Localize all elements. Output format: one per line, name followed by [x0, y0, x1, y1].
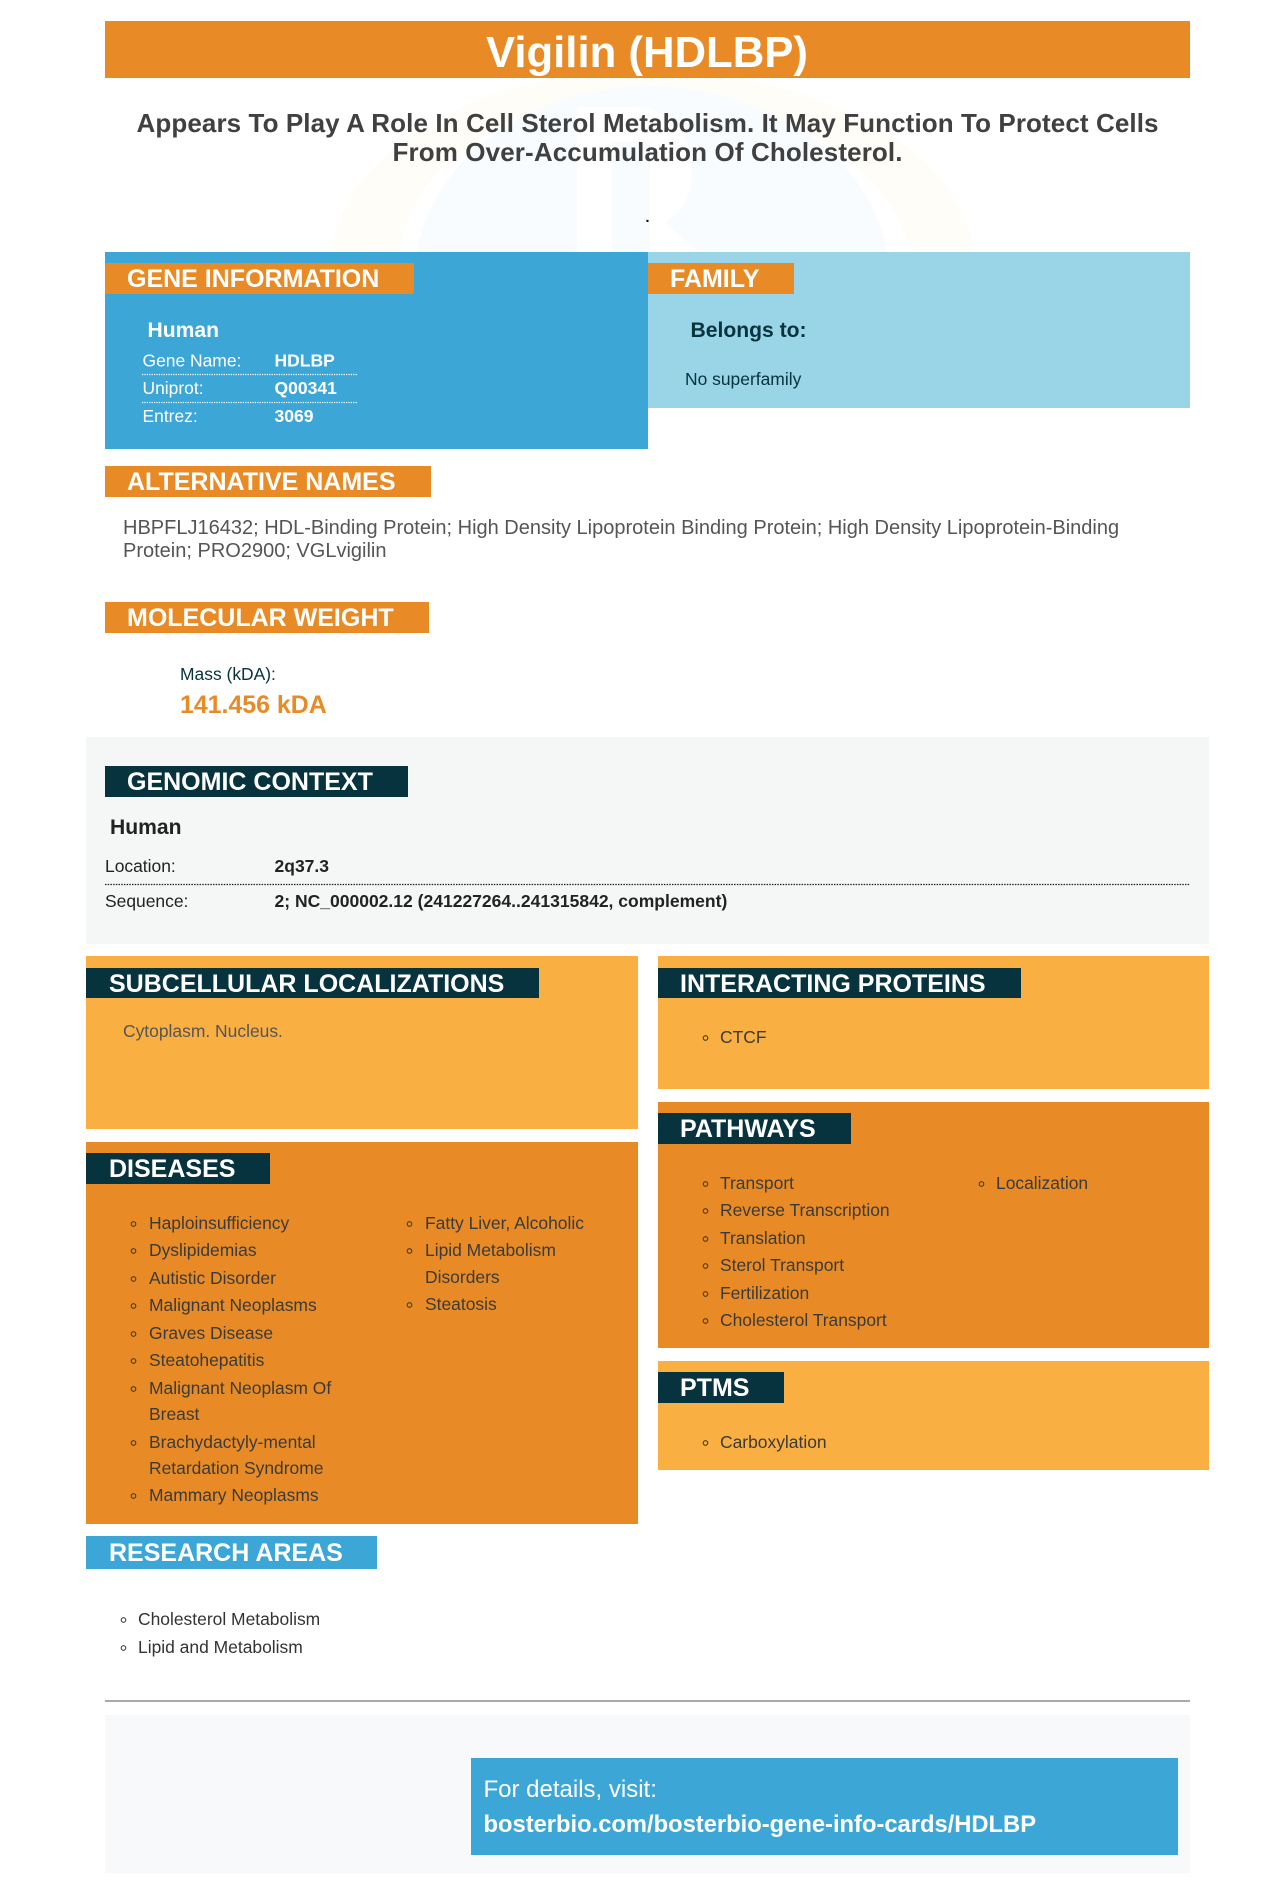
- heading: molecular weight: MOLECULAR WEIGHT: [127, 604, 394, 632]
- disease list column 1: Autistic Disorder: [149, 1268, 276, 1288]
- panel: ptms: [658, 1361, 1209, 1470]
- disease list column 1: Malignant Neoplasms: [149, 1295, 317, 1315]
- panel: interacting proteins: [658, 956, 1209, 1089]
- heading: gene information: GENE INFORMATION: [127, 265, 379, 293]
- heading: ptms: PTMS: [680, 1374, 749, 1402]
- disease list column 1: Haploinsufficiency: [149, 1213, 290, 1233]
- ptm list: Carboxylation: [720, 1432, 827, 1452]
- disease list column 2: Fatty Liver, Alcoholic: [425, 1213, 584, 1233]
- location row: 2q37.3: [274, 856, 329, 876]
- research list: Cholesterol Metabolism: [138, 1609, 320, 1629]
- uniprot row: [142, 378, 337, 398]
- heading: research areas: [86, 1536, 377, 1569]
- disease list column 1: Dyslipidemias: [149, 1240, 257, 1260]
- panel: gene information: [105, 252, 648, 449]
- heading: interacting proteins: INTERACTING PROTEINS: [680, 970, 986, 998]
- heading: alternative names: ALTERNATIVE NAMES: [127, 468, 396, 496]
- pathway list column 1: Fertilization: [720, 1283, 809, 1303]
- disease list column 1: Mammary Neoplasms: [149, 1485, 319, 1505]
- panel: family: [648, 252, 1190, 408]
- callout: details link: For details, visit:: [484, 1776, 657, 1803]
- disease list column 1: [131, 1213, 331, 1505]
- title banner: [105, 21, 1190, 78]
- title banner: Vigilin (HDLBP): [486, 28, 808, 77]
- research list: Lipid and Metabolism: [138, 1637, 303, 1657]
- heading: subcellular localizations: SUBCELLULAR LOCALIZATIONS: [109, 970, 504, 998]
- protein list: CTCF: [720, 1027, 766, 1047]
- disease list column 1: Steatohepatitis: [149, 1350, 265, 1370]
- uniprot row: Uniprot:: [142, 378, 204, 398]
- gene name row: HDLBP: [274, 350, 335, 370]
- gene name row: [142, 350, 335, 370]
- uniprot row: Q00341: [274, 378, 337, 398]
- heading: pathways: PATHWAYS: [680, 1115, 816, 1143]
- entrez row: Entrez:: [142, 406, 198, 426]
- section: research areas: [86, 1536, 377, 1657]
- disease list column 1: Malignant Neoplasm Of: [149, 1378, 331, 1398]
- small dot: .: [645, 209, 650, 226]
- pathway list column 1: Transport: [720, 1173, 794, 1193]
- panel: subcellular localizations: [86, 956, 638, 1129]
- belongs to label: Belongs to:: [690, 319, 807, 342]
- pathway list column 1: [703, 1173, 890, 1330]
- heading: family: FAMILY: [670, 265, 760, 293]
- subtitle description: From Over-Accumulation Of Cholesterol.: [392, 137, 902, 167]
- gene name row: Gene Name:: [142, 350, 241, 370]
- section: alternative names: [105, 466, 1119, 562]
- background watermark logo: [331, 70, 974, 256]
- pathway list column 2: Localization: [996, 1173, 1088, 1193]
- disease list column 1: Breast: [149, 1404, 200, 1424]
- alternative names text: HBPFLJ16432; HDL-Binding Protein; High Density Lipoprotein Binding Protein; High Density Lipoprotein-Binding: [123, 517, 1119, 539]
- heading: family: [648, 263, 794, 294]
- mass value: 141.456 kDA: [180, 691, 327, 719]
- heading: pathways: [658, 1113, 851, 1144]
- alternative names text: Protein; PRO2900; VGLvigilin: [123, 540, 386, 562]
- subtitle description: Appears To Play A Role In Cell Sterol Metabolism. It May Function To Protect Cells: [136, 108, 1158, 138]
- entrez row: [142, 406, 314, 426]
- research list: [121, 1609, 320, 1657]
- heading: ptms: [658, 1372, 784, 1403]
- pathway list column 1: Translation: [720, 1228, 806, 1248]
- mass label: Mass (kDA):: [180, 664, 276, 684]
- panel: diseases: [86, 1142, 638, 1524]
- entrez row: 3069: [274, 406, 314, 426]
- callout: details link: bosterbio.com/bosterbio-gene-info-cards/HDLBP: [484, 1812, 1036, 1838]
- disease list column 2: Steatosis: [425, 1294, 497, 1314]
- heading: research areas: RESEARCH AREAS: [109, 1539, 343, 1567]
- panel: footer: [105, 1715, 1190, 1873]
- pathway list column 1: Cholesterol Transport: [720, 1310, 887, 1330]
- location row: [105, 856, 329, 876]
- section: molecular weight: [105, 602, 429, 719]
- alternative names text: [123, 517, 1119, 562]
- sequence row: 2; NC_000002.12 (241227264..241315842, complement): [274, 891, 727, 911]
- species label: Human: [110, 816, 182, 839]
- disease list column 2: Lipid Metabolism: [425, 1240, 556, 1260]
- localization text: Cytoplasm. Nucleus.: [123, 1021, 283, 1041]
- disease list column 1: Brachydactyly-mental: [149, 1432, 316, 1452]
- species label: Human: [148, 319, 219, 342]
- sequence row: Sequence:: [105, 891, 188, 911]
- disease list column 2: Disorders: [425, 1267, 500, 1287]
- location row: Location:: [105, 856, 176, 876]
- heading: genomic context: GENOMIC CONTEXT: [127, 768, 373, 796]
- pathway list column 1: Sterol Transport: [720, 1255, 844, 1275]
- disease list column 1: Retardation Syndrome: [149, 1458, 323, 1478]
- heading: diseases: [86, 1153, 270, 1184]
- disease list column 2: [407, 1213, 584, 1314]
- disease list column 1: Graves Disease: [149, 1323, 273, 1343]
- family value: No superfamily: [685, 369, 802, 389]
- heading: diseases: DISEASES: [109, 1155, 235, 1183]
- panel: genomic context: [86, 737, 1209, 944]
- callout: details link: [471, 1758, 1178, 1855]
- panel: pathways: [658, 1102, 1209, 1348]
- subtitle description: [136, 108, 1158, 167]
- pathway list column 1: Reverse Transcription: [720, 1200, 890, 1220]
